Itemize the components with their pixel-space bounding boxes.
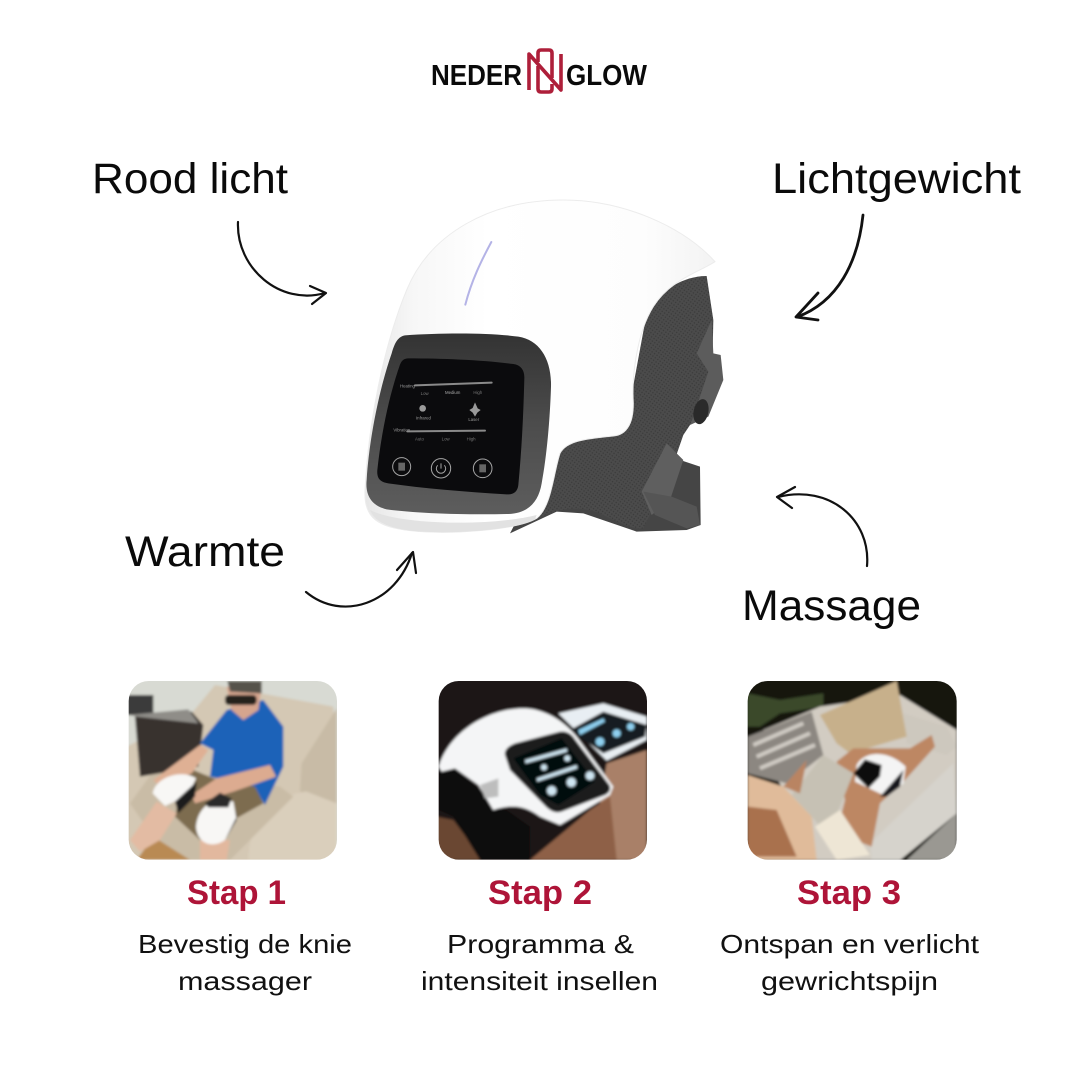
photo: step 1 man on sofa xyxy=(128,681,337,860)
setting labels: Heating xyxy=(400,383,416,388)
setting labels: Vibration xyxy=(393,428,411,433)
icons: touch buttons xyxy=(393,458,492,478)
heading: Stap 3: Stap 3 xyxy=(797,874,901,912)
text: step 2 description xyxy=(421,929,658,996)
logo: Neder Glow: GLOW xyxy=(566,60,648,92)
bezel: dark control panel frame xyxy=(366,333,551,514)
setting labels: Laser xyxy=(468,417,480,422)
heading: Stap 2: Stap 2 xyxy=(488,874,592,912)
setting labels: Auto xyxy=(415,437,424,442)
product: knee massager device xyxy=(365,200,723,533)
label: Rood licht: Rood licht xyxy=(92,155,288,203)
icon: logo monogram xyxy=(529,50,561,92)
photo: step 2 device on knee xyxy=(438,681,647,860)
setting labels: Low xyxy=(442,437,450,442)
text: step 2 description: Programma & xyxy=(447,929,634,959)
logo: Neder Glow xyxy=(431,50,648,92)
step 3 caption xyxy=(720,874,980,996)
setting labels: Medium xyxy=(445,390,461,395)
text: step 2 description: intensiteit insellen xyxy=(421,966,658,996)
icons: infrared and laser xyxy=(419,402,481,417)
shell: white dome xyxy=(365,200,715,532)
text: step 3 description: Ontspan en verlicht xyxy=(720,929,980,959)
text: step 1 description xyxy=(138,929,352,996)
arrow: Massage to device xyxy=(777,487,867,566)
sliders: heating and massage xyxy=(407,383,492,431)
arrow: Rood licht to device xyxy=(238,222,326,304)
setting labels: Infrared xyxy=(416,415,432,420)
strap: grey mesh band xyxy=(510,276,723,533)
screen: black touch panel xyxy=(377,358,524,494)
label: Lichtgewicht: Lichtgewicht xyxy=(772,155,1021,203)
heading: Stap 1: Stap 1 xyxy=(187,874,286,912)
photo: step 3 woman reading on sofa xyxy=(748,681,957,860)
indicator: blue light strip xyxy=(465,242,491,305)
step 2 caption xyxy=(421,874,658,996)
logo: Neder Glow: NEDER xyxy=(431,60,522,92)
shell: lower edge shadow xyxy=(370,510,537,532)
text: step 3 description: gewrichtspijn xyxy=(761,966,938,996)
text: step 3 description xyxy=(720,929,980,996)
setting labels: High xyxy=(473,390,483,395)
setting labels: High xyxy=(467,437,476,442)
text: step 1 description: massager xyxy=(178,966,312,996)
label: Massage: Massage xyxy=(742,582,921,630)
setting labels xyxy=(393,383,483,442)
text: step 1 description: Bevestig de knie xyxy=(138,929,352,959)
setting labels: Low xyxy=(421,391,429,396)
arrow: Warmte to device xyxy=(306,552,416,607)
label: Warmte: Warmte xyxy=(125,528,285,576)
arrow: Lichtgewicht to device xyxy=(796,215,863,320)
step 1 caption xyxy=(138,874,352,996)
